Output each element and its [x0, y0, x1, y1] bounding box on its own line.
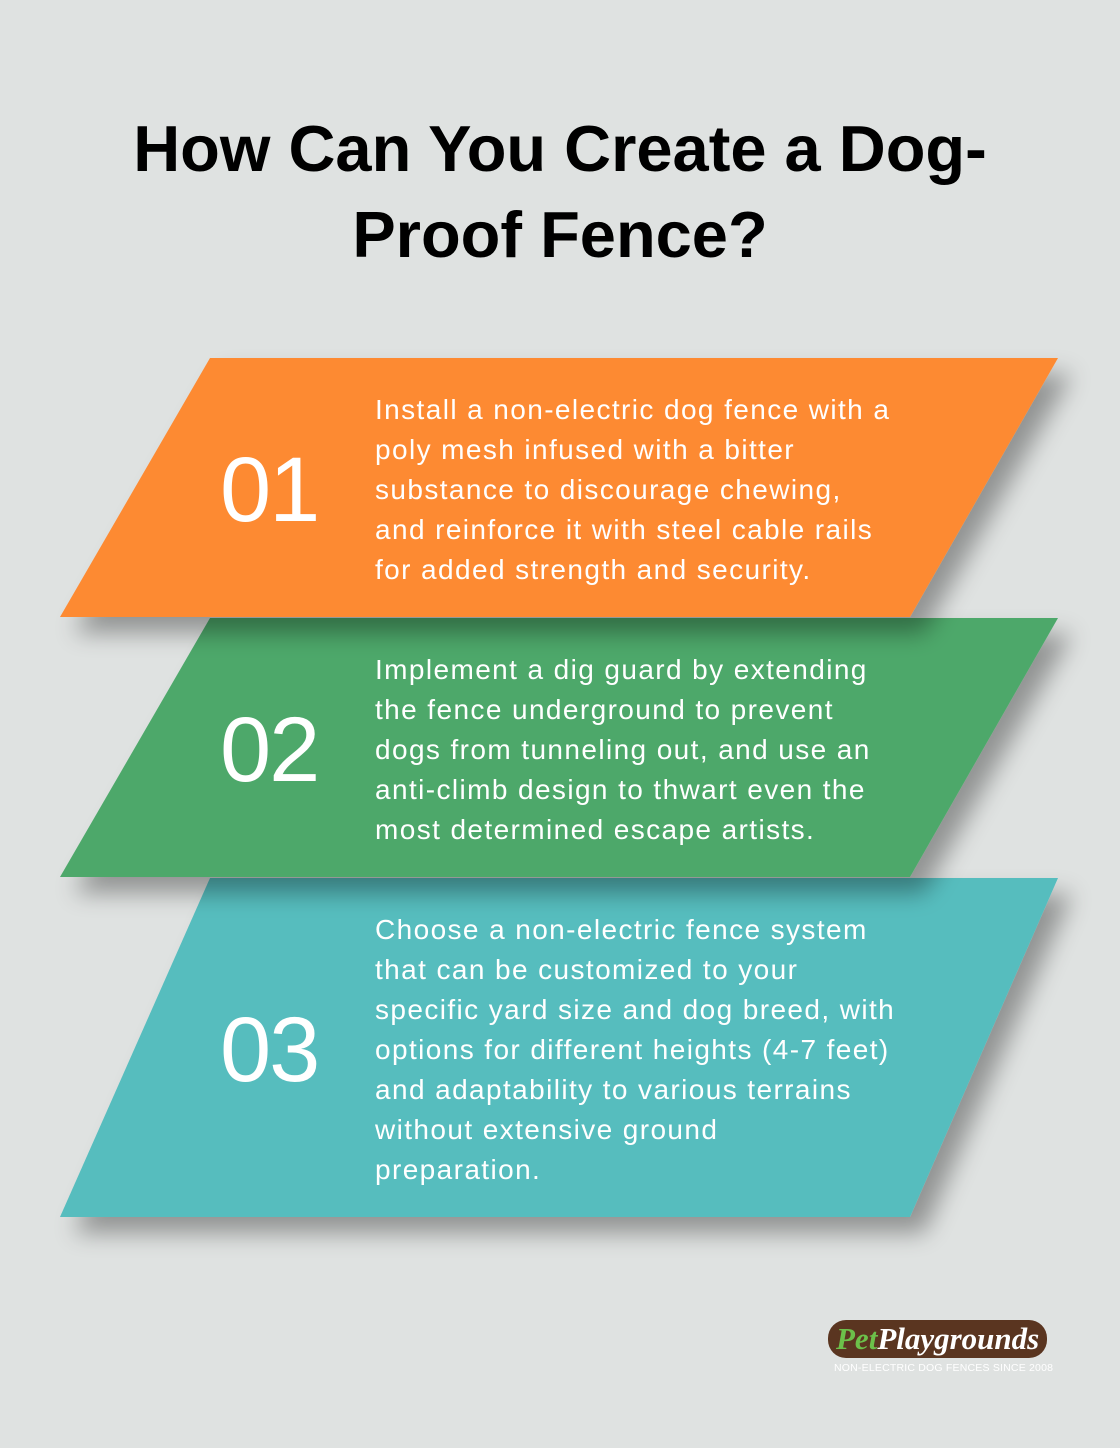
panel 3 text: and adaptability to various terrains: [375, 1074, 852, 1105]
panel 1 text: poly mesh infused with a bitter: [375, 434, 795, 465]
title: [133, 112, 987, 271]
panel 1 text: for added strength and security.: [375, 554, 812, 585]
panel 3 text: that can be customized to your: [375, 954, 798, 985]
panel 3 text: options for different heights (4-7 feet): [375, 1034, 890, 1065]
title: How Can You Create a Dog-: [133, 112, 987, 185]
panel 1 text: [375, 394, 890, 585]
panel 3 text: preparation.: [375, 1154, 541, 1185]
panel 1 shape: [60, 358, 1058, 617]
panel 2 shape: [60, 618, 1058, 877]
panel 3 text: [375, 914, 895, 1185]
panel 2 text: anti-climb design to thwart even the: [375, 774, 866, 805]
panel 2 text: [375, 654, 871, 845]
title: Proof Fence?: [352, 198, 768, 271]
panel 3 text: Choose a non-electric fence system: [375, 914, 868, 945]
panel 3 number: 03: [220, 999, 318, 1101]
panel 1 text: Install a non-electric dog fence with a: [375, 394, 890, 425]
panel 1 text: substance to discourage chewing,: [375, 474, 842, 505]
panel 1 text: and reinforce it with steel cable rails: [375, 514, 873, 545]
panel 2 text: most determined escape artists.: [375, 814, 815, 845]
logo wordmark: PetPlaygrounds: [836, 1321, 1039, 1356]
panel 1 number: 01: [220, 439, 318, 541]
panel 2 text: Implement a dig guard by extending: [375, 654, 868, 685]
logo: [828, 1320, 1053, 1374]
panel 2 number: 02: [220, 699, 318, 801]
panel 3 text: specific yard size and dog breed, with: [375, 994, 895, 1025]
panel 3 shape: [60, 878, 1058, 1217]
logo tagline: NON-ELECTRIC DOG FENCES SINCE 2008: [834, 1362, 1053, 1374]
panel 3 text: without extensive ground: [375, 1114, 718, 1145]
panel 2 text: the fence underground to prevent: [375, 694, 834, 725]
panel 2 text: dogs from tunneling out, and use an: [375, 734, 871, 765]
